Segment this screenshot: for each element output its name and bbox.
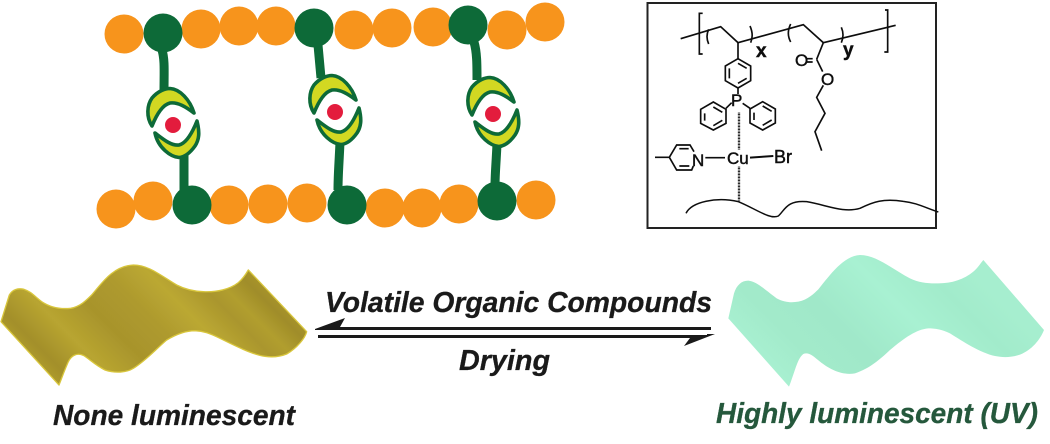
bottom polymer chain: [96, 180, 556, 228]
gold film: non-luminescent state: [1, 265, 307, 385]
panel: chemical structure: [648, 3, 938, 228]
crosslink stems: [162, 42, 497, 190]
label: highly luminescent: Highly luminescent (UV): [716, 398, 1038, 430]
structure atom labels: O: [795, 51, 808, 70]
structure atom labels: Cu: [727, 149, 749, 168]
crosslink unit 2: ligands and metal ion: [310, 76, 361, 144]
arrow to mint film: [318, 334, 715, 346]
pyridine ligand: [655, 145, 694, 170]
green anchor beads: [144, 6, 516, 224]
structure atom labels: x: [756, 41, 767, 62]
polymer network diagram: [96, 2, 564, 228]
structure atom labels: N: [692, 151, 704, 170]
structure atom labels: O: [821, 70, 834, 89]
label: volatile organic compounds: Volatile Organic Compounds: [325, 287, 712, 319]
structure atom labels: P: [731, 91, 742, 110]
reversible arrows: [315, 318, 715, 346]
top polymer chain: [104, 2, 564, 54]
polymer backbone: [681, 25, 896, 43]
dashed coordination bonds: [735, 113, 742, 201]
crosslink unit 3: ligands and metal ion: [468, 78, 519, 146]
label: drying: Drying: [459, 345, 550, 377]
mint film: luminescent state: [728, 255, 1044, 387]
structure atom labels: y: [843, 40, 854, 61]
structure atom labels: Br: [774, 147, 792, 167]
structure atom labels: [692, 40, 854, 170]
arrow to gold film: [315, 318, 711, 330]
label: none luminescent: None luminescent: [53, 400, 296, 432]
crosslink unit 1: ligands and metal ion: [148, 88, 199, 158]
side chains: [735, 43, 740, 59]
substrate curve: [686, 200, 938, 217]
